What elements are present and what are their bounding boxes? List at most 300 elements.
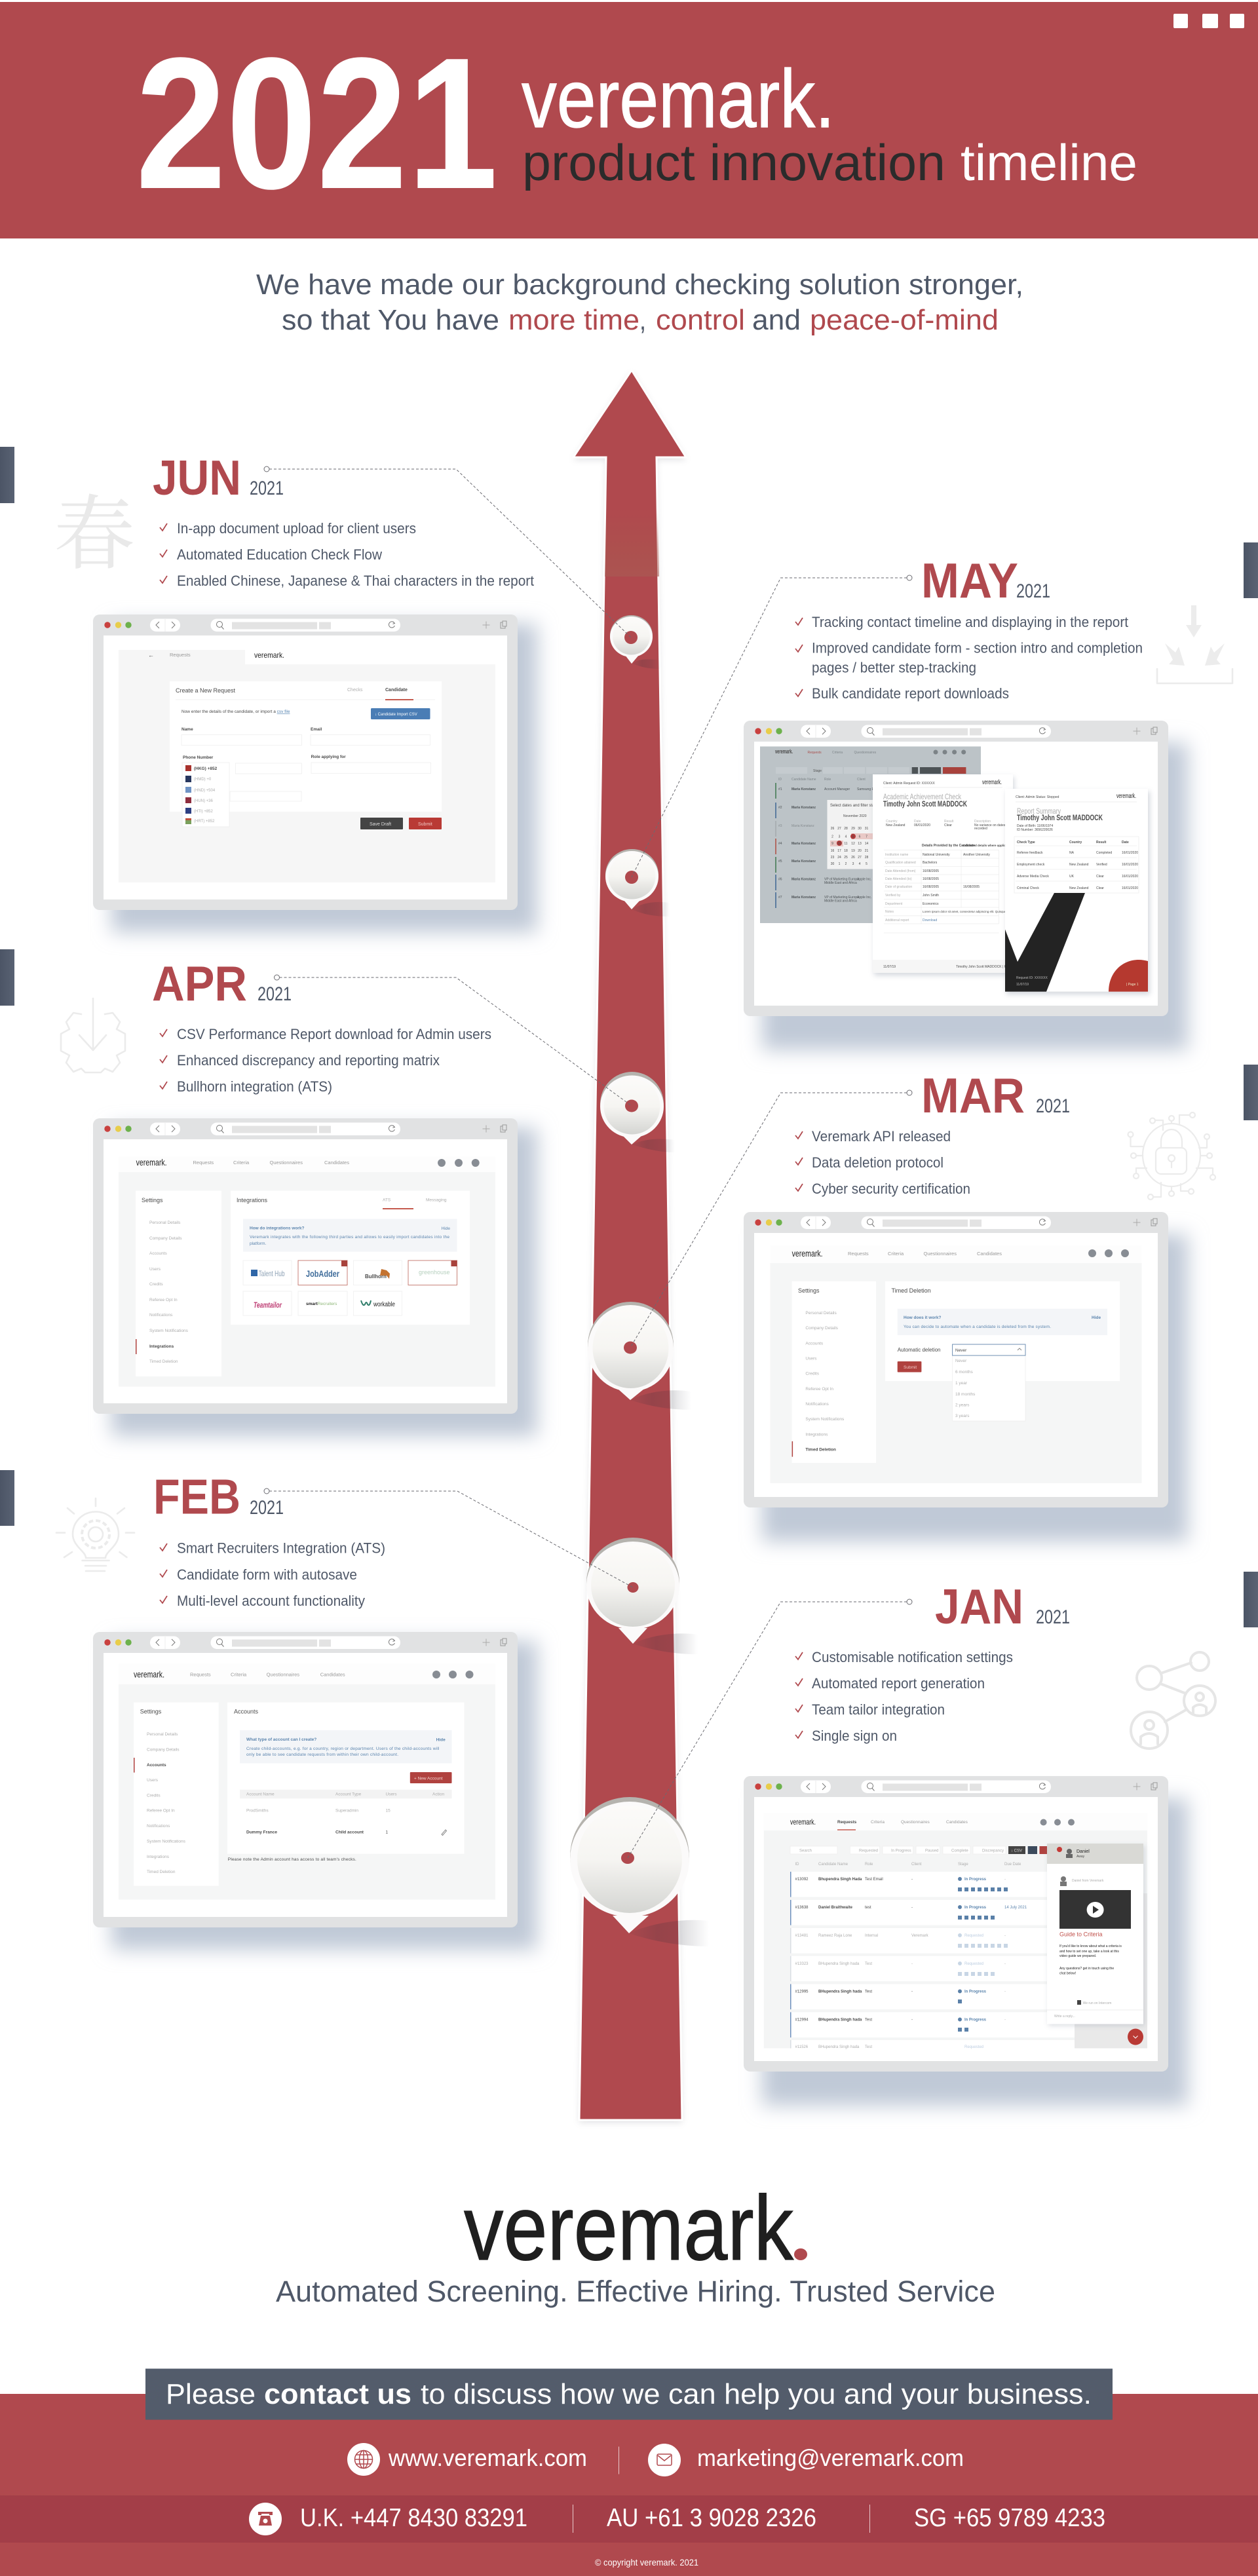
pin: MAR [588,1302,691,1410]
browser mockup: accounts settings: only be able to see candidate requests from within their own child-account. [246,1752,398,1757]
requests table dimmed: Middle East and Africa [824,899,857,903]
chat widget: Guide to Criteria [1059,1931,1103,1938]
table rows: - [1004,1990,1006,1994]
intro statement [256,269,1023,336]
browser mockup: accounts settings: Account Type [335,1792,362,1796]
table rows: BHupendra Singh hada [818,2045,860,2049]
heading: APR: APR [152,956,247,1011]
intro statement: peace-of-mind [810,304,999,336]
phone numbers: AU +61 3 9028 2326 [607,2504,816,2532]
pin: JUN [610,615,660,669]
browser mockup: accounts settings: Criteria [231,1672,247,1678]
tagline: Automated Screening. Effective Hiring. Trusted Service [276,2275,995,2308]
browser mockup: accounts settings: Notifications [147,1824,170,1828]
browser mockup: new request form: Name [181,727,193,732]
report page: summary: 11/07/19 [1016,983,1029,987]
icon: bulk download [1157,605,1232,683]
contact banner [145,2369,1113,2420]
report page: summary: veremark. [1116,793,1136,800]
browser mockup: accounts settings: Action [432,1792,444,1796]
icon: globe [347,2443,380,2476]
browser mockup: new request form: (HRT) +852 [194,820,215,824]
table rows [790,1872,1075,2049]
browser mockup: new request form: Requests [170,652,191,658]
browser mockup: integrations settings: Accounts [149,1251,167,1256]
browser mockup: accounts settings: Settings [140,1708,162,1714]
report page: summary: Adverse Media Check [1017,875,1049,879]
year label: 2021 [1036,1095,1070,1117]
browser mockup: new request form [93,615,537,932]
date picker: 18 [844,849,848,853]
date picker: 28 [844,827,848,831]
browser mockup: accounts settings: Referee Opt In [147,1809,175,1813]
date picker: 13 [858,842,862,846]
browser mockup: accounts settings: Child account [335,1830,364,1835]
browser mockup: timed deletion settings: You can decide to automate when a candidate is deleted from the system. [904,1325,1051,1329]
browser mockup: requests table with chat: Complete [951,1849,968,1853]
chat widget: Daniel [1077,1849,1090,1854]
table rows: #12995 [795,1990,809,1994]
title subtitle: timeline [961,134,1137,191]
report page: summary: New Zealand [1069,886,1089,890]
requests table dimmed: Maria Konstanz [791,842,816,846]
table rows: - [911,1878,913,1882]
integration logos: JobAdder [306,1268,339,1279]
requests table dimmed: veremark. [775,748,793,755]
date picker [827,800,879,869]
year label: 2021 [1016,580,1050,602]
heading: MAY: MAY [921,553,1018,608]
report page: academic check: Date of graduation [885,885,912,889]
report page: academic check: National University [923,853,950,857]
browser mockup: new request form: Save Draft [370,822,391,827]
report page: academic check: 16/08/2005 [923,885,939,889]
contact banner: contact us [264,2378,411,2410]
chat widget: Away [1077,1855,1085,1859]
table rows: - [911,2018,913,2022]
browser mockup: requests table with chat: Stage [958,1863,968,1866]
icon: envelope [648,2444,681,2476]
table rows: Daniel Braithwaite [818,1906,853,1910]
report page: summary: | Page 1 [1126,983,1139,987]
browser mockup: integrations settings: How do integrations work? [250,1226,304,1231]
report page: summary: Criminal Check [1017,886,1039,890]
integration logos [243,1260,457,1316]
date picker: 1 [839,862,841,866]
watermark: spring character: 春 [54,490,135,580]
browser mockup: requests table with chat [744,1776,1188,2106]
report page: academic check: Country [886,820,898,824]
browser mockup: timed deletion settings: Candidates [977,1251,1002,1257]
requests table dimmed: Criteria [832,751,843,755]
report page: summary: Verified [1096,863,1107,867]
browser mockup: requests table with chat: Search [799,1849,812,1853]
date picker: 5 [866,862,867,866]
browser mockup: accounts settings: Personal Details [147,1732,178,1737]
feature list: Team tailor integration [812,1701,945,1718]
date picker: 3 [852,862,854,866]
browser mockup: requests table with chat: Paused [925,1849,938,1853]
requests table dimmed: Apple Inc. [857,878,871,882]
requests table dimmed: Samsung Elec [857,787,879,791]
heading: FEB: FEB [153,1469,240,1524]
feature list: Tracking contact timeline and displaying in the report [812,614,1129,630]
requests table dimmed: Middle East and Africa [824,881,857,885]
table rows: - [911,1990,913,1994]
requests table dimmed: VP of Marketing Europe [824,896,859,900]
table rows: In Progress [964,1878,987,1882]
report page: academic check: Another University [963,853,990,857]
browser mockup: reports [744,721,1188,1050]
report page: summary: 16/01/2020 [1122,875,1138,879]
date picker: 26 [831,827,834,831]
title year: 2021 [136,18,498,228]
browser mockup: timed deletion settings: Hide [1092,1316,1101,1320]
browser mockup: timed deletion settings: Credits [805,1372,820,1376]
report page: academic check: Date [914,820,921,824]
feature list [160,1540,385,1609]
browser mockup: new request form: ← [148,652,154,658]
feature list: pages / better step-tracking [812,659,976,676]
table rows: In Progress [964,2018,987,2022]
feature list [795,1128,970,1197]
report page: summary [1005,789,1150,994]
feature list [795,1649,1013,1744]
leader line [632,575,912,877]
leader line [264,466,631,637]
table rows: Bhupendra Singh Hada [818,1878,862,1882]
browser mockup: accounts settings: 1 [385,1830,388,1835]
browser mockup: accounts settings: Credits [147,1793,161,1798]
window control squares [1173,14,1244,28]
leader line [274,975,632,1106]
intro statement: We have made our background checking solution stronger, [256,269,1023,301]
feature list: In-app document upload for client users [177,520,416,537]
feature list: Veremark API released [812,1128,951,1145]
feature list: Bullhorn integration (ATS) [177,1078,332,1095]
browser mockup: integrations settings [93,1118,537,1436]
icon: idea bulb gear [56,1498,134,1571]
browser mockup: accounts settings: Users [385,1792,397,1796]
browser mockup: requests table with chat: Criteria [871,1820,885,1825]
browser mockup: new request form: (HMD) +0 [194,778,212,782]
requests table dimmed: #3 [778,824,782,828]
browser mockup: requests table with chat: Role [865,1863,873,1866]
requests table dimmed: Maria Konstanz [791,787,816,791]
contact banner: Please [166,2378,256,2410]
browser mockup: timed deletion settings: Personal Details [805,1311,837,1316]
table rows: Requested [964,1934,983,1938]
browser mockup: integrations settings: platform. [250,1241,266,1246]
browser mockup: timed deletion settings: Submit [904,1365,917,1370]
title subtitle: product innovation [522,134,945,191]
report page: academic check: Bachelors [923,861,938,865]
pin: MAY [605,849,670,917]
intro statement: , [639,304,646,336]
report page: academic check: No variance on dates [974,824,1006,827]
browser mockup: new request form: Create a New Request [176,687,236,694]
phone numbers: SG +65 9789 4233 [914,2504,1105,2532]
requests table dimmed: #5 [778,860,782,863]
table rows: #12994 [795,2018,809,2022]
table rows: - [911,1962,913,1966]
browser mockup: integrations settings: Notifications [149,1313,173,1317]
requests table dimmed: ID [778,778,782,782]
table rows: #13638 [795,1906,809,1910]
chat widget: chat below! [1059,1972,1076,1976]
browser mockup: accounts settings: System Notifications [147,1840,186,1844]
table rows: #11526 [795,2045,809,2049]
date picker: 21 [865,849,868,853]
report page: academic check: Qualification attained [885,861,916,865]
report page: summary: Request ID: XXXXXX [1016,976,1048,980]
browser mockup: timed deletion settings: Timed Deletion [805,1448,836,1452]
date picker: 20 [858,849,862,853]
report page: academic check: Client: Admin Request ID: XXXXXX [883,782,935,786]
date picker: 2 [831,835,833,839]
browser mockup: timed deletion settings: Criteria [888,1251,904,1257]
browser mockup: timed deletion settings: Timed Deletion [891,1287,931,1294]
browser mockup: timed deletion settings: System Notifications [805,1417,845,1422]
browser mockup: timed deletion settings: 3 years [955,1414,970,1418]
date picker: 12 [851,842,855,846]
report page: academic check: Clear [944,824,952,827]
browser mockup: accounts settings: Accounts [234,1708,259,1714]
report page: summary: UK [1069,875,1075,879]
date picker: 10 [837,842,841,846]
feature list: Multi-level account functionality [177,1593,366,1609]
browser mockup: accounts settings: Account Name [246,1792,275,1796]
table rows: Requested [964,2045,983,2049]
report page: summary: Report Summary [1017,806,1061,816]
footer band [0,2369,1258,2576]
leader line [264,1488,633,1587]
report page: summary: 16/01/2020 [1122,863,1138,867]
integration logos: workable [373,1301,395,1308]
browser mockup: timed deletion settings: Requests [848,1251,869,1257]
browser mockup: accounts settings: Superadmin [335,1809,358,1813]
browser mockup: accounts settings: Requests [190,1672,211,1678]
browser mockup: new request form: veremark. [254,651,284,660]
footer logo: veremark [464,2176,794,2279]
report page: academic check: Additional report [885,919,909,922]
icon: people network [1131,1652,1215,1749]
date picker: 11 [844,842,848,846]
report page: summary: Check Type [1017,841,1035,844]
browser mockup: accounts settings: Accounts [147,1763,166,1768]
requests table dimmed: #4 [778,842,782,846]
requests table dimmed: Account Manager [824,787,850,791]
table rows: Test [865,1962,872,1966]
intro statement: and [752,304,801,336]
browser mockup: requests table with chat: veremark. [790,1817,816,1827]
header banner [0,2,1258,238]
requests table dimmed: Candidate Name [791,778,816,782]
browser mockup: timed deletion settings: Questionnaires [924,1251,957,1257]
report page: academic check: 16/08/2005 [923,869,939,873]
requests table dimmed [760,746,981,923]
requests table dimmed: Maria Konstanz [791,896,816,900]
table rows: Rameez Raja Lone [818,1934,852,1938]
browser mockup: accounts settings: veremark. [134,1669,164,1680]
report page: academic check: Description [974,820,991,824]
browser mockup: timed deletion settings: Never [955,1359,967,1363]
leader line [630,1090,912,1348]
report page: summary: Date of Birth: 11/06/1974 [1017,824,1053,828]
requests table dimmed: Maria Konstanz [791,860,816,863]
browser mockup: requests table with chat: Questionnaires [901,1820,930,1825]
report page: academic check: Date Attended (from) [885,869,916,873]
feature list: Customisable notification settings [812,1649,1013,1665]
report page: summary: Employment check [1017,863,1045,867]
table rows: Requested [964,1962,983,1966]
feature list [160,1026,491,1095]
browser mockup: integrations settings: ATS [383,1198,391,1203]
table rows: Test [865,1990,872,1994]
heading: MAR: MAR [921,1068,1025,1123]
report page: academic check: 16/08/2005 [923,877,939,881]
table rows: In Progress [964,1906,987,1910]
requests table dimmed: #6 [778,878,782,882]
report page: summary: 16/01/2020 [1122,851,1138,855]
browser mockup: new request form: (HTI) +852 [194,810,214,814]
browser mockup: integrations settings: Veremark integrates with the following third parties and allows to easily import candidates into the [250,1235,449,1240]
requests table dimmed: #7 [778,896,782,900]
browser mockup: accounts settings [93,1632,537,1950]
table rows: Test [865,2018,872,2022]
browser mockup: requests table with chat: ID [795,1863,799,1866]
report page: academic check: Economics [923,902,939,906]
browser mockup: timed deletion settings: Never [955,1348,967,1353]
browser mockup: timed deletion settings: Users [805,1356,817,1361]
date picker: 19 [851,849,855,853]
report page: academic check: Institution name [885,853,909,857]
table rows: #13481 [795,1934,809,1938]
browser mockup: new request form: (HKG) +852 [194,767,218,771]
date picker: 27 [837,827,841,831]
side tabs [0,447,1258,1627]
feature list: Bulk candidate report downloads [812,685,1009,702]
year label: 2021 [257,983,292,1005]
browser mockup: accounts settings: ProdSmiths [246,1809,269,1813]
table rows: Internal [865,1934,878,1938]
intro statement: so that You have [282,304,499,336]
date picker: 27 [858,856,862,860]
feature list: Data deletion protocol [812,1154,943,1171]
browser mockup: timed deletion settings: 2 years [955,1403,970,1408]
report page: academic check: John Smith [923,894,939,898]
browser mockup: integrations settings: Referee Opt In [149,1298,178,1302]
browser mockup: timed deletion settings: 6 months [955,1370,973,1374]
report page: academic check: Result [944,820,954,824]
browser mockup: timed deletion settings: Referee Opt In [805,1387,833,1392]
browser mockup: accounts settings: Timed Deletion [147,1870,176,1874]
browser mockup: integrations settings: Criteria [233,1160,250,1165]
browser mockup: integrations settings: Questionnaires [270,1160,303,1165]
report page: summary: Result [1096,841,1107,844]
browser mockup: integrations settings: Hide [442,1226,450,1231]
browser mockup: timed deletion settings: veremark. [792,1248,823,1259]
browser mockup: requests table with chat: ↓ CSV [1011,1849,1022,1853]
browser mockup: requests table with chat: Client [911,1863,922,1866]
browser mockup: accounts settings: Create child-accounts, e.g. for a country, region or department. Users of the child-accounts will [246,1747,440,1751]
report page: academic check: Timothy John Scott MADDOCK [883,799,967,808]
chat widget [1047,1844,1145,2045]
date picker: 30 [831,862,834,866]
feature list: Enhanced discrepancy and reporting matrix [177,1052,440,1069]
requests table dimmed: Questionnaires [854,751,877,755]
chat widget: and how to set one up, take a look at this [1059,1950,1119,1954]
report page: academic check: New Zealand [886,824,905,827]
date picker: 16 [831,849,834,853]
browser mockup: integrations settings: Integrations [149,1344,174,1349]
date picker: 31 [865,827,868,831]
date picker: 29 [851,827,855,831]
date picker: 3 [839,835,841,839]
feature list: Single sign on [812,1728,897,1744]
browser mockup: timed deletion settings: Integrations [805,1432,828,1437]
browser mockup: timed deletion settings: 18 months [955,1392,976,1397]
browser mockup: timed deletion settings: 1 year [955,1381,968,1386]
requests table dimmed: Apple Inc. [857,896,871,900]
chat widget: We run on Intercom [1083,2001,1111,2005]
chat widget: Write a reply... [1054,2015,1075,2018]
chat widget: Daniel from Veremark [1072,1879,1104,1883]
pin: APR [600,1072,675,1152]
table rows: #13323 [795,1962,809,1966]
date picker: Select dates and filter stage [830,804,879,808]
report page: academic check: Verified by [885,894,901,898]
report page: summary: ID Number: 3656220026 [1017,828,1053,832]
report page: summary: Clear [1096,875,1104,879]
report page: academic check: Date Attended (to) [885,877,912,881]
date picker: 6 [859,835,861,839]
report page: academic check: Notes [885,910,894,914]
browser mockup: new request form: (HUN) +36 [194,799,214,803]
date picker: November 2020 [843,814,867,818]
table rows: - [1004,1934,1006,1938]
date picker: 9 [831,842,833,846]
table rows: BHupendra Singh hada [818,1962,860,1966]
table rows: 14 July 2021 [1004,1906,1027,1910]
browser mockup: integrations settings: System Notifications [149,1329,189,1333]
phone numbers [249,2503,1105,2535]
copyright: © copyright veremark. 2021 [595,2557,698,2567]
browser mockup: accounts settings: Dummy France [246,1830,277,1835]
date picker: 2 [845,862,847,866]
contact banner: to discuss how we can help you and your business. [421,2378,1092,2410]
icon: telephone [249,2503,282,2535]
table rows: Test Email [865,1878,883,1882]
date picker: 5 [852,835,854,839]
email link [648,2444,964,2476]
requests table dimmed: Maria Konstanz [791,806,816,810]
panel: APR [61,956,632,1436]
browser mockup: timed deletion settings: Settings [798,1287,820,1294]
feature list: Cyber security certification [812,1181,970,1197]
report page: academic check: veremark. [982,779,1002,786]
website link [347,2443,587,2476]
phone numbers: U.K. +447 8430 83291 [300,2504,527,2532]
report page: summary: Referee feedback [1017,851,1043,855]
requests table dimmed: Maria Konstanz [791,878,816,882]
feature list: Automated Education Check Flow [177,546,383,563]
browser mockup: new request form: ↓ Candidate Import CSV [375,713,417,717]
report page: academic check: Timothy John Scott MADDOCK | Page 4 [956,965,1015,969]
icon: cyber security lock [1128,1112,1215,1200]
table rows: #13092 [795,1878,809,1882]
browser mockup: timed deletion settings: Notifications [805,1402,829,1407]
